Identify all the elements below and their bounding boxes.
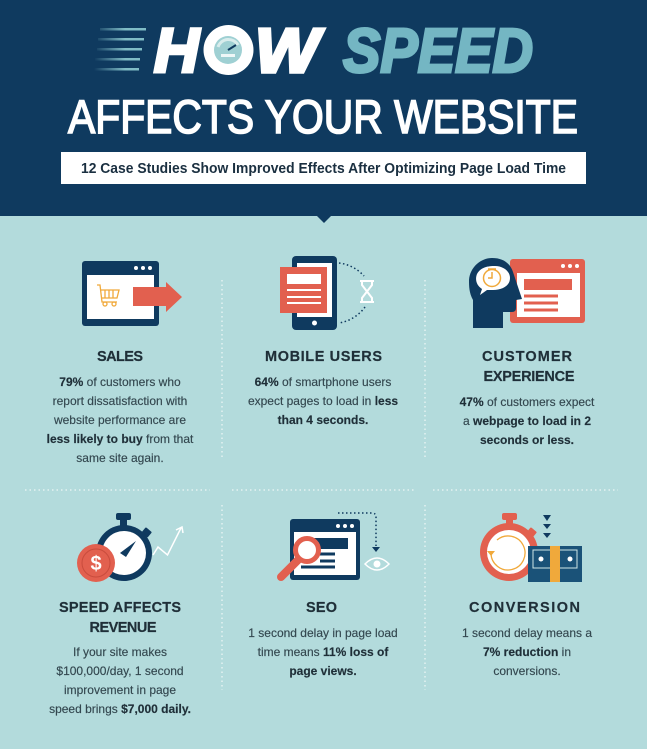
icon: stopwatch with money — [480, 513, 582, 582]
text: seo: 1 second delay in page load — [248, 626, 398, 640]
heading: speed affects revenue: REVENUE — [90, 620, 157, 636]
icon: phone with document and hourglass — [280, 256, 374, 330]
icon: stopwatch with dollar: $ — [90, 553, 102, 575]
header banner — [0, 0, 647, 223]
text: conversion: 1 second delay means a — [462, 626, 592, 640]
heading: customer experience — [482, 349, 575, 385]
heading: customer experience: CUSTOMER — [482, 349, 573, 365]
text: seo: time means 11% loss of — [258, 645, 388, 659]
text: customer experience: seconds or less. — [480, 433, 574, 447]
icon: speedometer O — [204, 25, 254, 75]
text: speed affects revenue: improvement in page — [64, 683, 176, 697]
title: affects your website: AFFECTS YOUR WEBSITE — [68, 90, 578, 143]
text: seo: page views. — [289, 664, 357, 678]
text: speed affects revenue: If your site makes — [73, 645, 167, 659]
heading: mobile users: MOBILE USERS — [265, 349, 382, 365]
icon: stopwatch with dollar — [77, 513, 183, 582]
text: conversion: 7% reduction in — [483, 645, 571, 659]
text: customer experience: a webpage to load in 2 — [463, 414, 591, 428]
icon: cart — [97, 285, 119, 306]
icon: head with browser window — [469, 258, 585, 328]
subtitle box — [61, 152, 586, 184]
text: sales: same site again. — [76, 451, 164, 465]
heading: speed affects revenue — [59, 600, 181, 636]
text: sales: website performance are — [53, 413, 186, 427]
heading: speed affects revenue: SPEED AFFECTS — [59, 600, 181, 616]
heading: conversion: CONVERSION — [469, 600, 580, 616]
text: conversion: conversions. — [493, 664, 561, 678]
title: letter H: H — [154, 17, 200, 86]
text: customer experience: 47% of customers expect — [460, 395, 594, 409]
icon: sales window with cart and arrow — [82, 261, 182, 326]
text: speed affects revenue: speed brings $7,000 daily. — [49, 702, 191, 716]
text: sales: less likely to buy from that — [47, 432, 193, 446]
text: sales: report dissatisfaction with — [53, 394, 187, 408]
icon: seo window with magnifier — [281, 513, 389, 580]
speed lines — [94, 28, 146, 70]
text: mobile users: expect pages to load in less — [248, 394, 398, 408]
text: mobile users: 64% of smartphone users — [255, 375, 391, 389]
title: speed: SPEED — [343, 17, 533, 86]
heading: customer experience: EXPERIENCE — [484, 369, 575, 385]
heading: sales: SALES — [97, 349, 143, 365]
text: mobile users: than 4 seconds. — [278, 413, 368, 427]
heading: seo: SEO — [306, 600, 337, 616]
title: letter W: W — [255, 17, 324, 86]
subtitle box: 12 Case Studies Show Improved Effects After Optimizing Page Load Time — [81, 161, 566, 177]
text: speed affects revenue: $100,000/day, 1 second — [56, 664, 184, 678]
text: sales: 79% of customers who — [59, 375, 181, 389]
